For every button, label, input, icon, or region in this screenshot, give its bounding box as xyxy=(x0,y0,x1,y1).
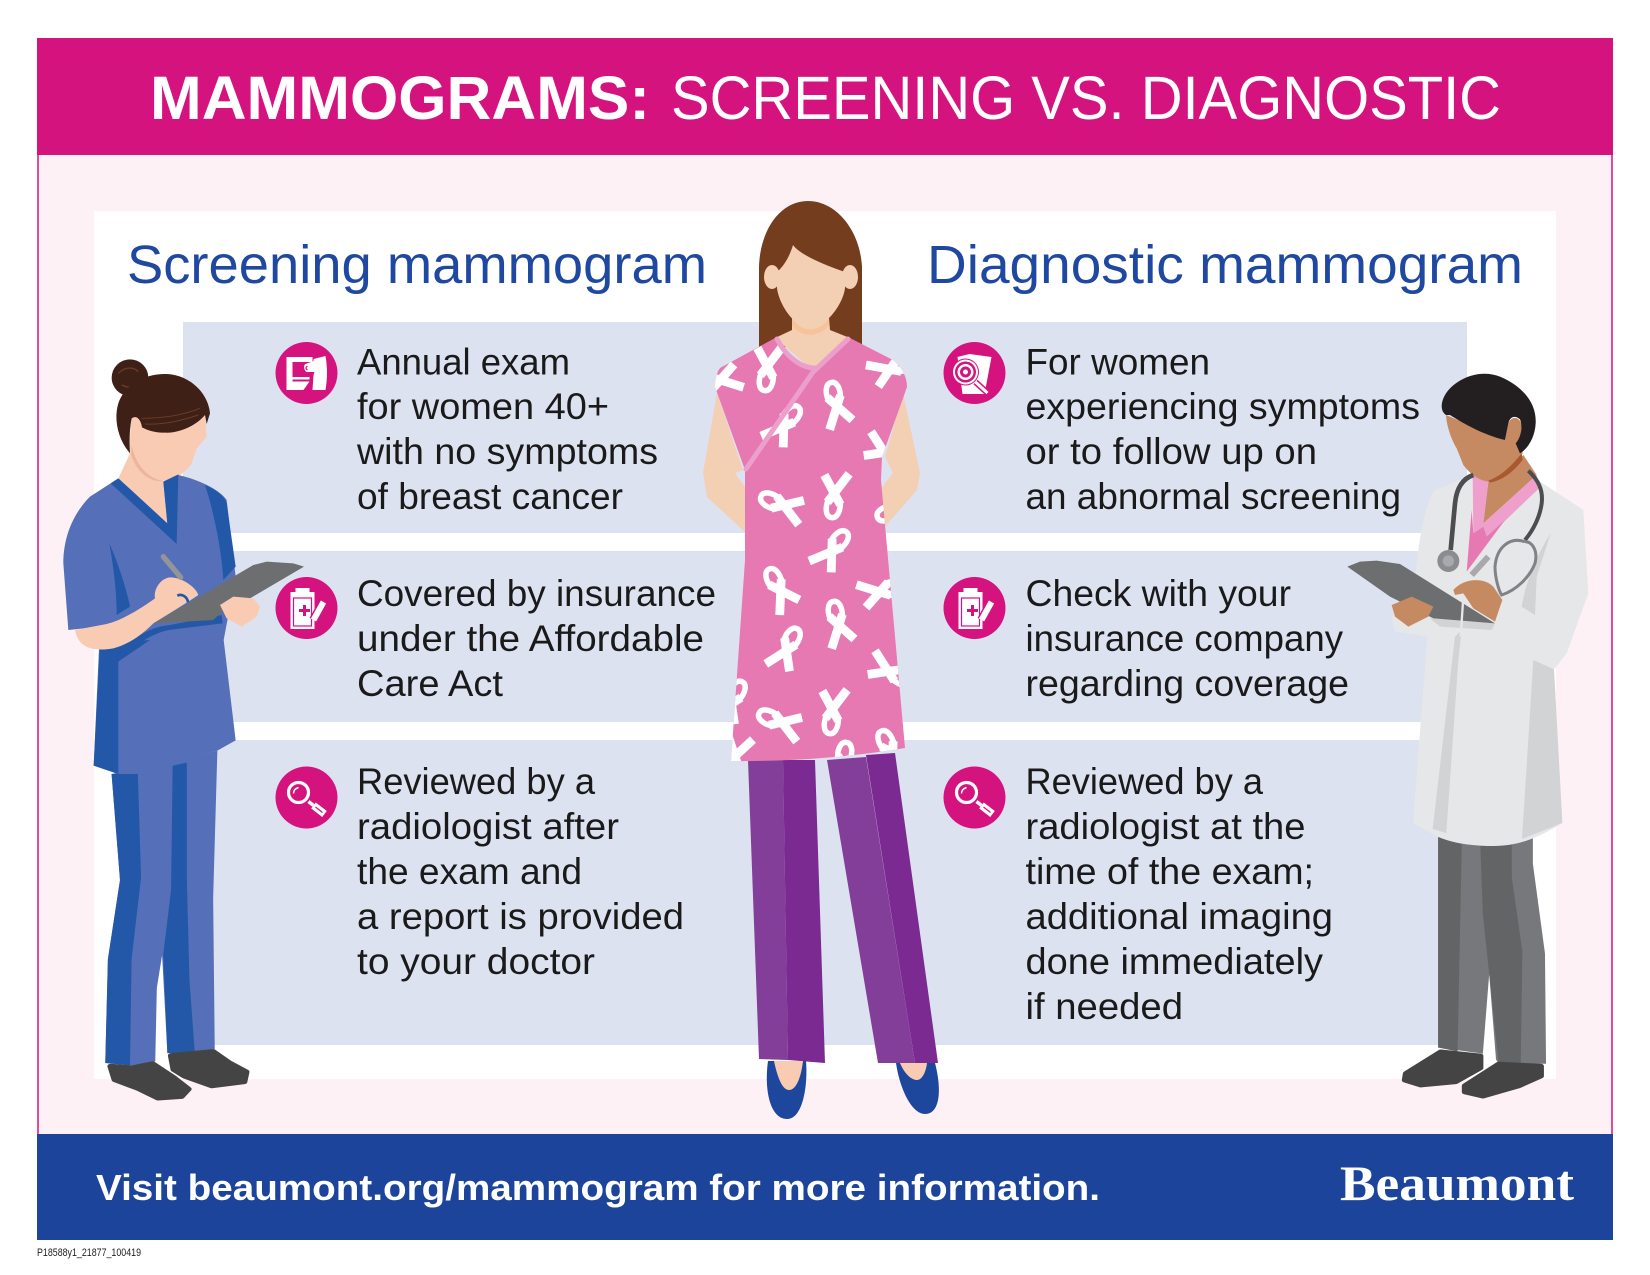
icon: magnifying glass xyxy=(276,766,338,828)
doctor neck shadow xyxy=(1488,453,1523,483)
doctor coat folds xyxy=(1430,533,1562,839)
text: radiologist review after exam xyxy=(357,761,684,982)
row 3 background xyxy=(183,740,1467,1045)
row 2 background xyxy=(183,551,1467,722)
title banner xyxy=(37,38,1613,155)
text: annual exam: Annual exam xyxy=(357,342,570,382)
patient ears xyxy=(764,265,858,289)
nurse second hand xyxy=(220,597,260,627)
doctor pink shirt xyxy=(1467,475,1539,572)
doctor pants xyxy=(1438,837,1546,1064)
text: radiologist review at exam: radiologist at the xyxy=(1026,806,1306,847)
figure: central patient in ribbon gown xyxy=(694,201,939,1119)
nurse finger shadow xyxy=(177,595,188,602)
nurse hair bun xyxy=(112,359,148,396)
nurse neck shadow xyxy=(131,445,163,481)
screening row 2: insurance xyxy=(276,573,716,704)
text: annual exam: with no symptoms xyxy=(356,431,658,472)
nurse scrub top xyxy=(63,475,236,774)
text: radiologist review at exam: done immediately xyxy=(1026,941,1324,982)
diagnostic row 2: insurance xyxy=(944,573,1349,704)
text: insurance coverage: under the Affordable xyxy=(357,618,704,659)
nurse upper body xyxy=(63,359,304,774)
text: radiologist review at exam xyxy=(1026,761,1333,1027)
nurse face and neck xyxy=(118,415,207,523)
patient arms xyxy=(703,393,920,533)
logo: Beaumont: Beaumont xyxy=(1340,1155,1574,1211)
text: annual exam xyxy=(356,342,658,517)
icon: mammogram machine xyxy=(276,342,338,404)
doctor face xyxy=(1446,415,1523,482)
text: annual exam: of breast cancer xyxy=(357,476,623,517)
text: for women experiencing symptoms: or to follow up on xyxy=(1026,431,1317,472)
nurse shoes xyxy=(111,1052,246,1098)
heading: diagnostic mammogram: Diagnostic mammogram xyxy=(927,235,1523,295)
text: check with insurance: Check with your xyxy=(1026,573,1291,614)
text: for women experiencing symptoms: an abnormal screening xyxy=(1026,476,1401,517)
nurse pen xyxy=(163,557,181,577)
figure: doctor in white coat xyxy=(1347,374,1588,1096)
patient face xyxy=(777,245,845,328)
text: radiologist review after exam: the exam and xyxy=(357,851,582,892)
text: for women experiencing symptoms: experiencing symptoms xyxy=(1026,386,1420,427)
text: radiologist review after exam: Reviewed by a xyxy=(357,761,595,802)
patient shoes and feet xyxy=(767,1061,939,1119)
text: radiologist review at exam: time of the exam; xyxy=(1026,851,1314,892)
nurse forearm and hand xyxy=(75,577,198,649)
nurse scrub dark panels xyxy=(94,474,236,774)
screening row 1: annual exam xyxy=(276,342,658,517)
footer call to action: Visit beaumont.org/mammogram for more information. xyxy=(96,1167,1100,1208)
diagnostic row 1: symptoms xyxy=(944,342,1420,517)
text: check with insurance: insurance company xyxy=(1026,618,1343,659)
nurse pants xyxy=(105,751,217,1065)
patient hair xyxy=(759,201,862,347)
title text: SCREENING VS. DIAGNOSTIC xyxy=(671,64,1501,132)
icon: clipboard and pen xyxy=(276,577,338,639)
patient neck shadow xyxy=(792,318,829,335)
text: radiologist review after exam: a report is provided xyxy=(357,896,684,937)
doctor shoes xyxy=(1405,1052,1541,1096)
icon: clipboard and pen xyxy=(944,577,1006,639)
text: for women experiencing symptoms xyxy=(1026,342,1420,517)
title text: MAMMOGRAMS: xyxy=(150,64,650,132)
diagnostic row 3: review xyxy=(944,761,1333,1027)
doctor neck xyxy=(1483,455,1537,523)
text: check with insurance xyxy=(1026,573,1349,704)
text: check with insurance: regarding coverage xyxy=(1026,663,1349,704)
text: insurance coverage: Care Act xyxy=(357,663,504,704)
gown collar and wrap seam xyxy=(746,339,848,469)
row 1 background xyxy=(183,322,1467,533)
icon: breast image with magnifier xyxy=(944,342,1006,404)
patient pants xyxy=(748,753,938,1063)
patient gown xyxy=(715,338,907,761)
doctor upper body xyxy=(1347,374,1588,846)
text: radiologist review after exam: to your doctor xyxy=(357,941,595,982)
nurse clipboard xyxy=(153,562,304,623)
text: insurance coverage: Covered by insurance xyxy=(357,573,716,614)
doctor clipboard xyxy=(1347,561,1495,623)
doctor hair xyxy=(1442,374,1536,453)
job code: P18588y1_21877_100419 xyxy=(37,1247,141,1259)
doctor hands xyxy=(1392,580,1502,637)
doctor lab coat xyxy=(1392,475,1588,846)
doctor stethoscope xyxy=(1437,471,1542,595)
text: radiologist review after exam: radiologist after xyxy=(357,806,619,847)
doctor pen xyxy=(1472,557,1488,575)
nurse hair xyxy=(116,374,210,453)
patient neck xyxy=(775,318,850,372)
text: radiologist review at exam: additional imaging xyxy=(1026,896,1333,937)
text: annual exam: for women 40+ xyxy=(357,386,609,427)
background panel: pale pink frame xyxy=(38,150,1612,1140)
text: radiologist review at exam: Reviewed by a xyxy=(1026,761,1263,802)
figure: nurse in blue scrubs xyxy=(63,359,304,1098)
panel: white content area xyxy=(94,211,1556,1079)
text: insurance coverage xyxy=(357,573,716,704)
footer banner xyxy=(37,1134,1613,1240)
icon: magnifying glass xyxy=(944,766,1006,828)
screening row 3: review xyxy=(276,761,684,982)
ribbon pattern on gown xyxy=(715,345,904,762)
heading: screening mammogram: Screening mammogram xyxy=(127,235,707,295)
text: radiologist review at exam: if needed xyxy=(1026,986,1183,1027)
text: for women experiencing symptoms: For women xyxy=(1026,342,1210,382)
